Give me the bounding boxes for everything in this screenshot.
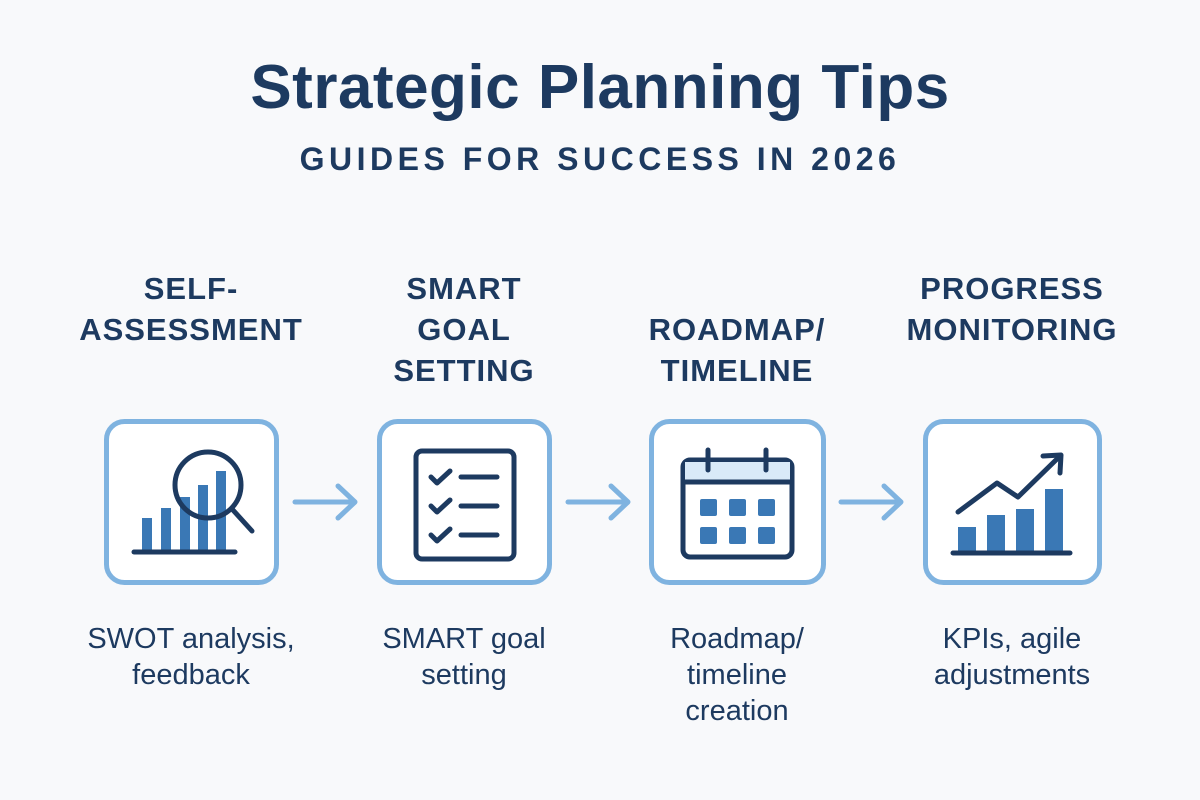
text: roadmap description <box>670 623 804 727</box>
text: smart goal description <box>382 623 546 691</box>
arrow 2 <box>568 486 628 518</box>
heading: self-assessment: SELF- <box>144 271 238 306</box>
text: roadmap description: timeline <box>687 659 787 691</box>
text: self-assessment description: feedback <box>132 659 250 691</box>
panel: roadmap icon <box>652 422 824 582</box>
arrow 3 <box>841 486 901 518</box>
heading: smart goal setting: GOAL <box>417 312 511 347</box>
heading: smart goal setting <box>393 271 535 388</box>
heading: roadmap/timeline <box>649 312 825 388</box>
title: Strategic Planning Tips <box>250 53 950 122</box>
panel: self-assessment icon <box>106 422 276 582</box>
heading: roadmap/timeline: TIMELINE <box>661 353 813 388</box>
heading: progress monitoring: PROGRESS <box>920 271 1104 306</box>
heading: self-assessment: ASSESSMENT <box>79 312 303 347</box>
panel: progress icon <box>926 422 1100 582</box>
arrow 1 <box>295 486 355 518</box>
text: self-assessment description: SWOT analysis, <box>87 623 295 655</box>
text: self-assessment description <box>87 623 295 691</box>
heading: progress monitoring <box>907 271 1117 347</box>
heading: smart goal setting: SMART <box>406 271 522 306</box>
heading: self-assessment <box>79 271 303 347</box>
heading: progress monitoring: MONITORING <box>907 312 1117 347</box>
heading: roadmap/timeline: ROADMAP/ <box>649 312 825 347</box>
text: roadmap description: creation <box>685 695 789 727</box>
text: smart goal description: SMART goal <box>382 623 546 655</box>
text: smart goal description: setting <box>421 659 507 691</box>
text: roadmap description: Roadmap/ <box>670 623 804 655</box>
text: progress description <box>934 623 1090 691</box>
text: progress description: adjustments <box>934 659 1090 691</box>
panel: smart goal icon <box>380 422 550 582</box>
subtitle: GUIDES FOR SUCCESS IN 2026 <box>300 141 900 177</box>
heading: smart goal setting: SETTING <box>393 353 535 388</box>
text: progress description: KPIs, agile <box>943 623 1081 655</box>
